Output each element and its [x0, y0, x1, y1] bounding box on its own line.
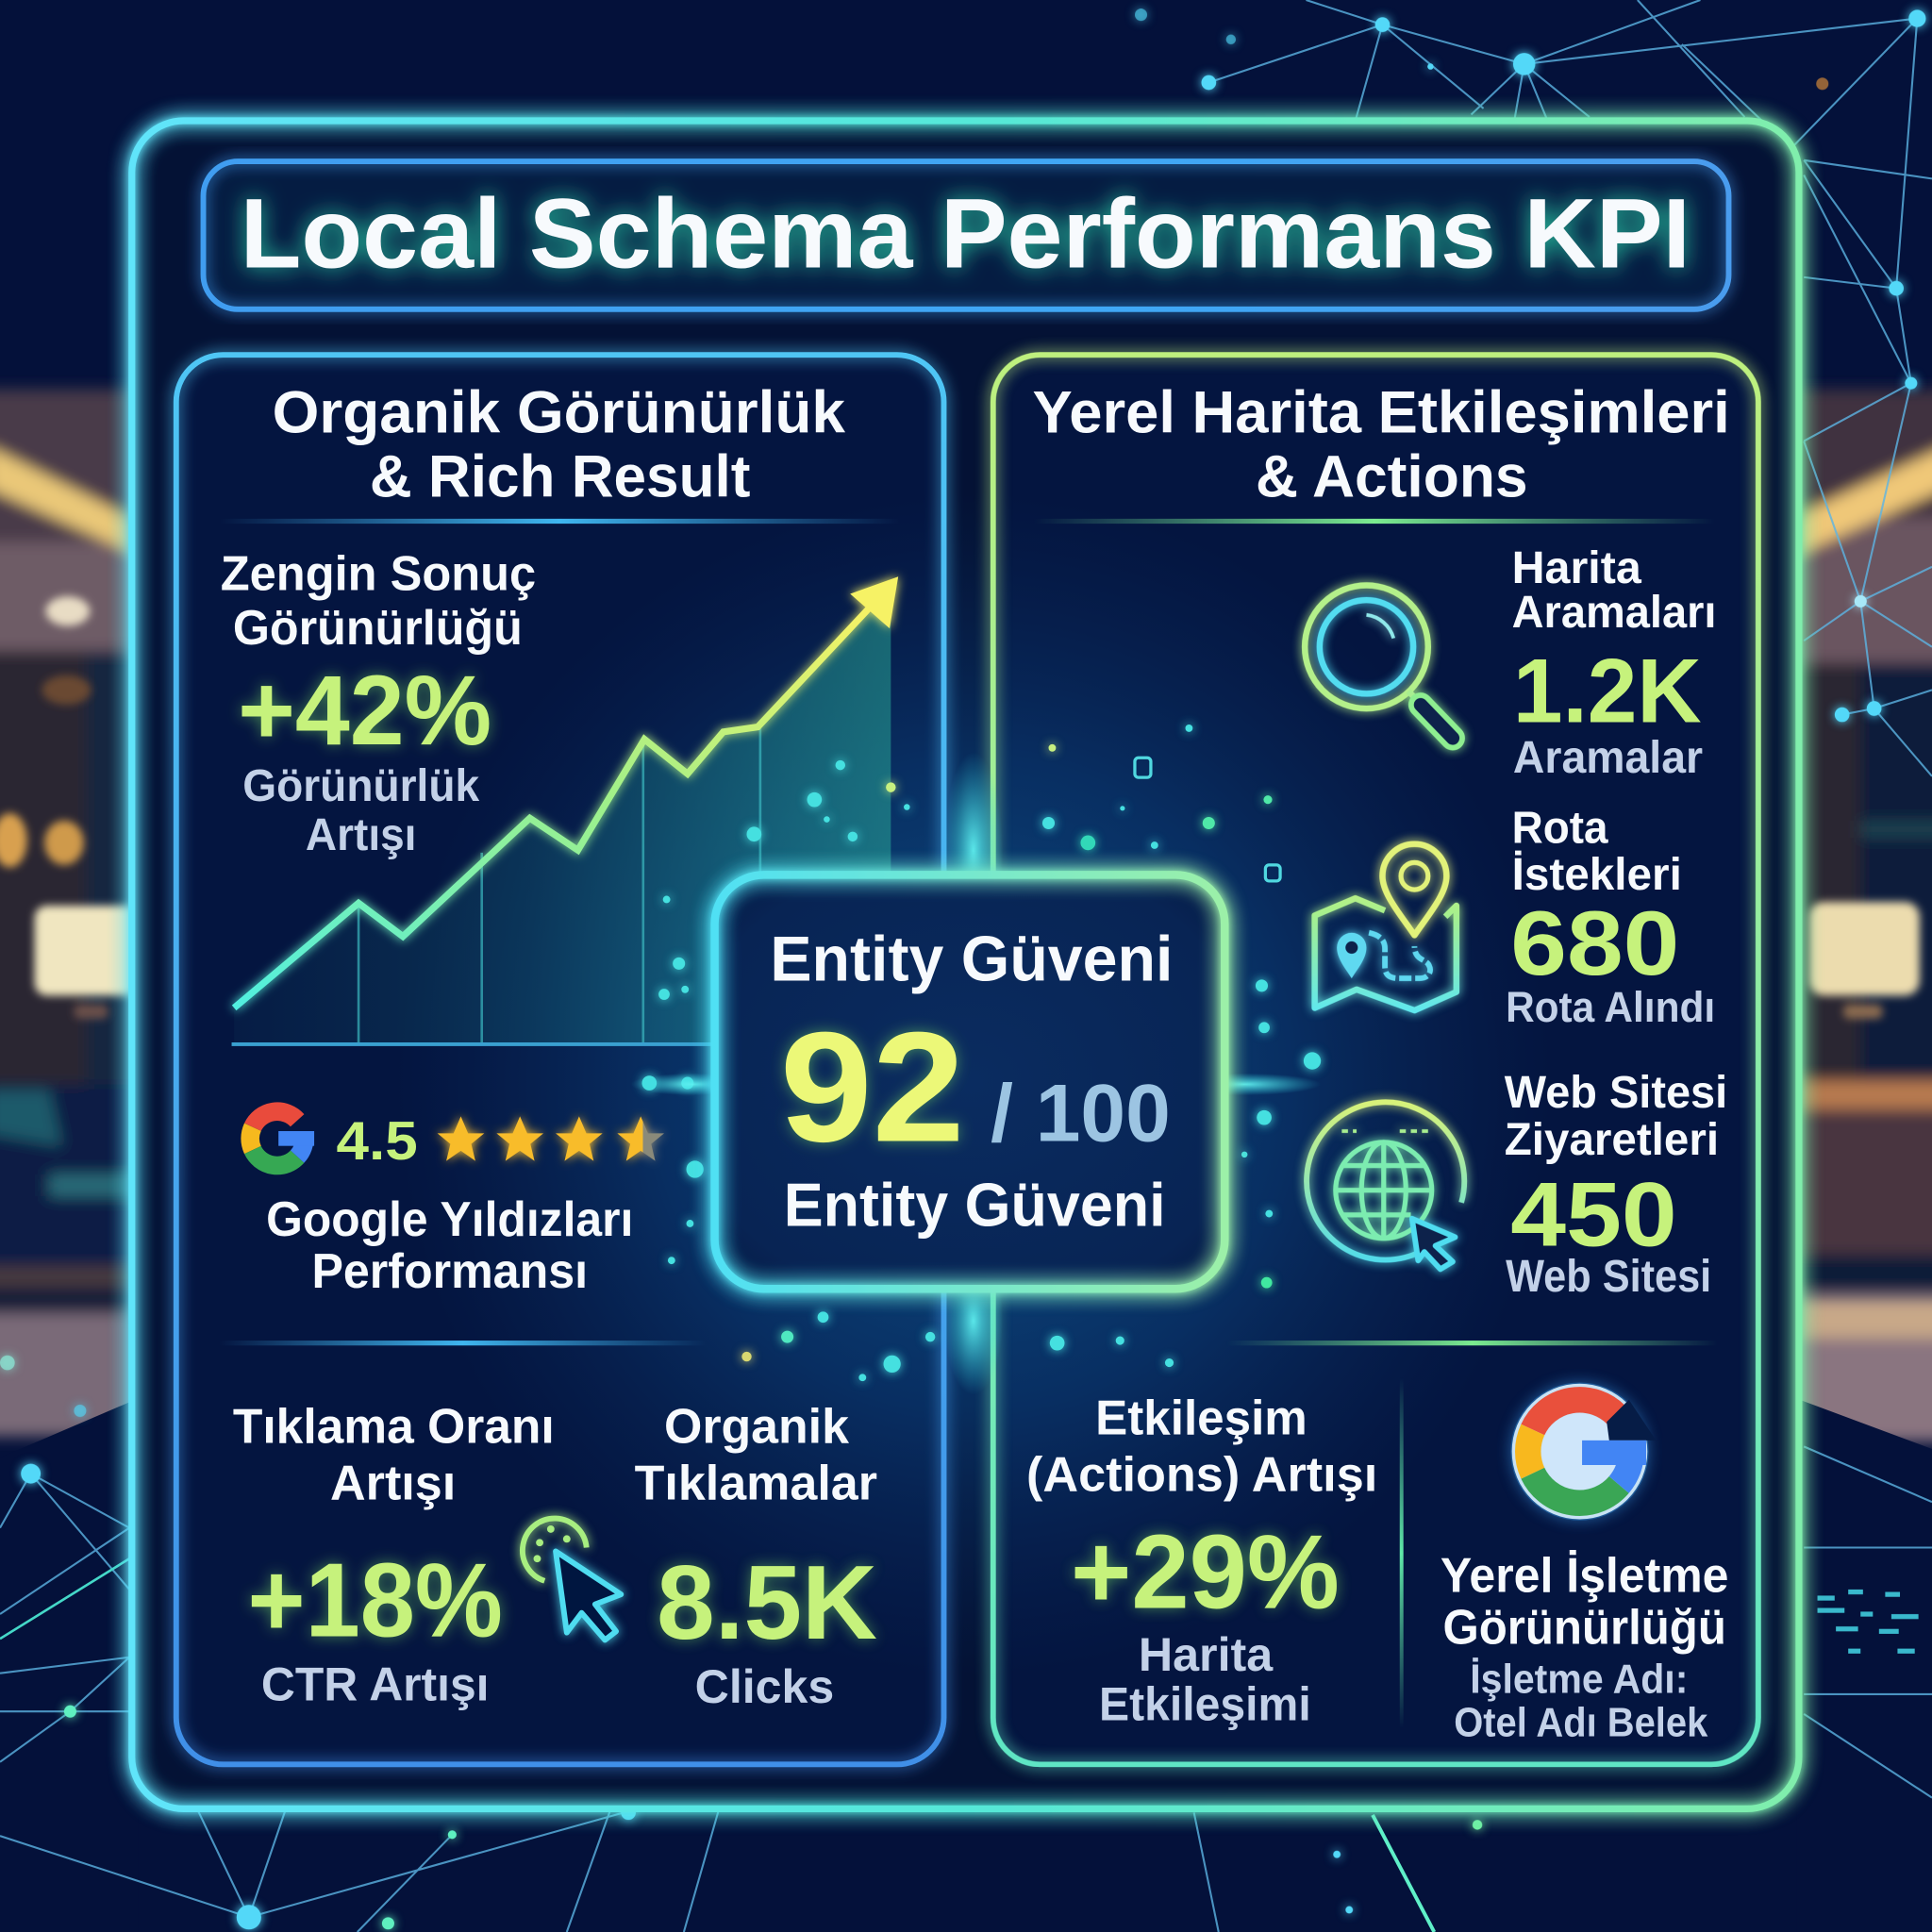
KPI: Yerel İşletme: Otel Adı Belek — [1454, 1700, 1708, 1745]
KPI: Zengin Sonuç: Görünürlüğü — [233, 601, 523, 656]
KPI: CTR: CTR Artışı — [261, 1657, 490, 1710]
KPI: Rota İstekleri — [1506, 802, 1715, 1031]
star rating — [438, 1116, 664, 1161]
KPI: Etkileşim Artışı: +29% — [1071, 1512, 1340, 1630]
KPI: Web Sitesi: Web Sitesi — [1506, 1251, 1711, 1302]
KPI: Harita Aramaları: Harita — [1512, 542, 1642, 593]
google rating: Google Yıldızları — [266, 1192, 633, 1247]
panel: Organik Görünürlük — [176, 355, 943, 1764]
KPI: Web Sitesi: 450 — [1510, 1164, 1677, 1265]
google rating: Performansı — [311, 1244, 588, 1299]
KPI: Etkileşim Artışı: (Actions) Artışı — [1026, 1447, 1377, 1502]
panel heading — [273, 379, 845, 509]
title: Local Schema Performans KPI — [241, 178, 1690, 289]
KPI: Rota İstekleri: İstekleri — [1512, 849, 1682, 900]
KPI: Yerel İşletme — [1441, 1549, 1728, 1745]
KPI: Yerel İşletme: Görünürlüğü — [1442, 1600, 1726, 1655]
KPI: Organik Tıklamalar: Clicks — [695, 1660, 834, 1713]
outer frame — [132, 121, 1799, 1808]
panel fills with centre glow — [176, 355, 1758, 1764]
centre flares — [631, 752, 1321, 1395]
google rating: 4.5 — [337, 1111, 418, 1172]
panel heading — [1033, 379, 1730, 509]
KPI: Rota İstekleri: Rota — [1512, 802, 1609, 853]
KPI: Etkileşim Artışı: Harita — [1139, 1628, 1274, 1681]
score suffix: / 100 — [991, 1068, 1171, 1158]
centre caption: Entity Güveni — [784, 1171, 1166, 1240]
icon: magnifier — [1305, 585, 1453, 738]
icon: click cursor — [523, 1519, 621, 1640]
KPI: Zengin Sonuç: Görünürlük — [242, 760, 479, 811]
centre card: Entity Güveni — [715, 874, 1224, 1289]
icon: large google G — [1510, 1382, 1656, 1521]
panel heading: & Rich Result — [370, 443, 751, 509]
KPI: CTR — [233, 1399, 555, 1710]
centre heading: Entity Güveni — [770, 924, 1173, 995]
KPI: Harita Aramaları: 1.2K — [1513, 641, 1702, 741]
KPI: Web Sitesi: Ziyaretleri — [1505, 1114, 1719, 1165]
small squares near centre — [1135, 758, 1280, 881]
google rating — [250, 1111, 664, 1299]
KPI: Organik Tıklamalar: 8.5K — [657, 1543, 877, 1661]
KPI: Etkileşim Artışı: Etkileşimi — [1099, 1677, 1311, 1730]
panel heading: Yerel Harita Etkileşimleri — [1033, 379, 1730, 445]
panel heading: Organik Görünürlük — [273, 379, 845, 445]
particles around centre — [641, 724, 1321, 1381]
icon: globe with cursor — [1307, 1102, 1464, 1269]
KPI: CTR: Tıklama Oranı — [233, 1399, 555, 1454]
KPI: Yerel İşletme: Yerel İşletme — [1441, 1549, 1728, 1604]
KPI: CTR: +18% — [248, 1541, 503, 1659]
KPI: Yerel İşletme: İşletme Adı: — [1470, 1657, 1688, 1703]
icon: google G — [250, 1111, 314, 1165]
panel heading: & Actions — [1256, 443, 1528, 509]
KPI: Zengin Sonuç: Artışı — [306, 809, 416, 860]
KPI: Harita Aramaları — [1512, 542, 1716, 783]
KPI: Zengin Sonuç: Zengin Sonuç — [221, 547, 536, 602]
KPI: Organik Tıklamalar: Tıklamalar — [635, 1457, 877, 1511]
KPI: Zengin Sonuç — [221, 547, 536, 860]
score 92: 92 — [780, 1000, 965, 1174]
KPI: Zengin Sonuç: +42% — [238, 656, 491, 766]
panel: Yerel Harita — [993, 355, 1758, 1764]
KPI: CTR: Artışı — [330, 1457, 456, 1511]
line chart with arrow — [232, 576, 898, 1046]
KPI: Harita Aramaları: Aramaları — [1512, 587, 1716, 638]
KPI: Organik Tıklamalar: Organik — [664, 1399, 850, 1454]
KPI: Rota İstekleri: Rota Alındı — [1506, 983, 1715, 1031]
KPI: Web Sitesi: Web Sitesi — [1505, 1067, 1727, 1118]
KPI: Etkileşim Artışı — [1026, 1391, 1377, 1730]
KPI: Etkileşim Artışı: Etkileşim — [1095, 1391, 1307, 1445]
KPI: Web Sitesi — [1505, 1067, 1727, 1302]
KPI: Rota İstekleri: 680 — [1510, 893, 1679, 994]
icon: map with pin — [1315, 844, 1457, 1010]
title box — [204, 161, 1728, 309]
KPI: Organik Tıklamalar — [635, 1399, 877, 1713]
KPI: Harita Aramaları: Aramalar — [1513, 732, 1703, 783]
